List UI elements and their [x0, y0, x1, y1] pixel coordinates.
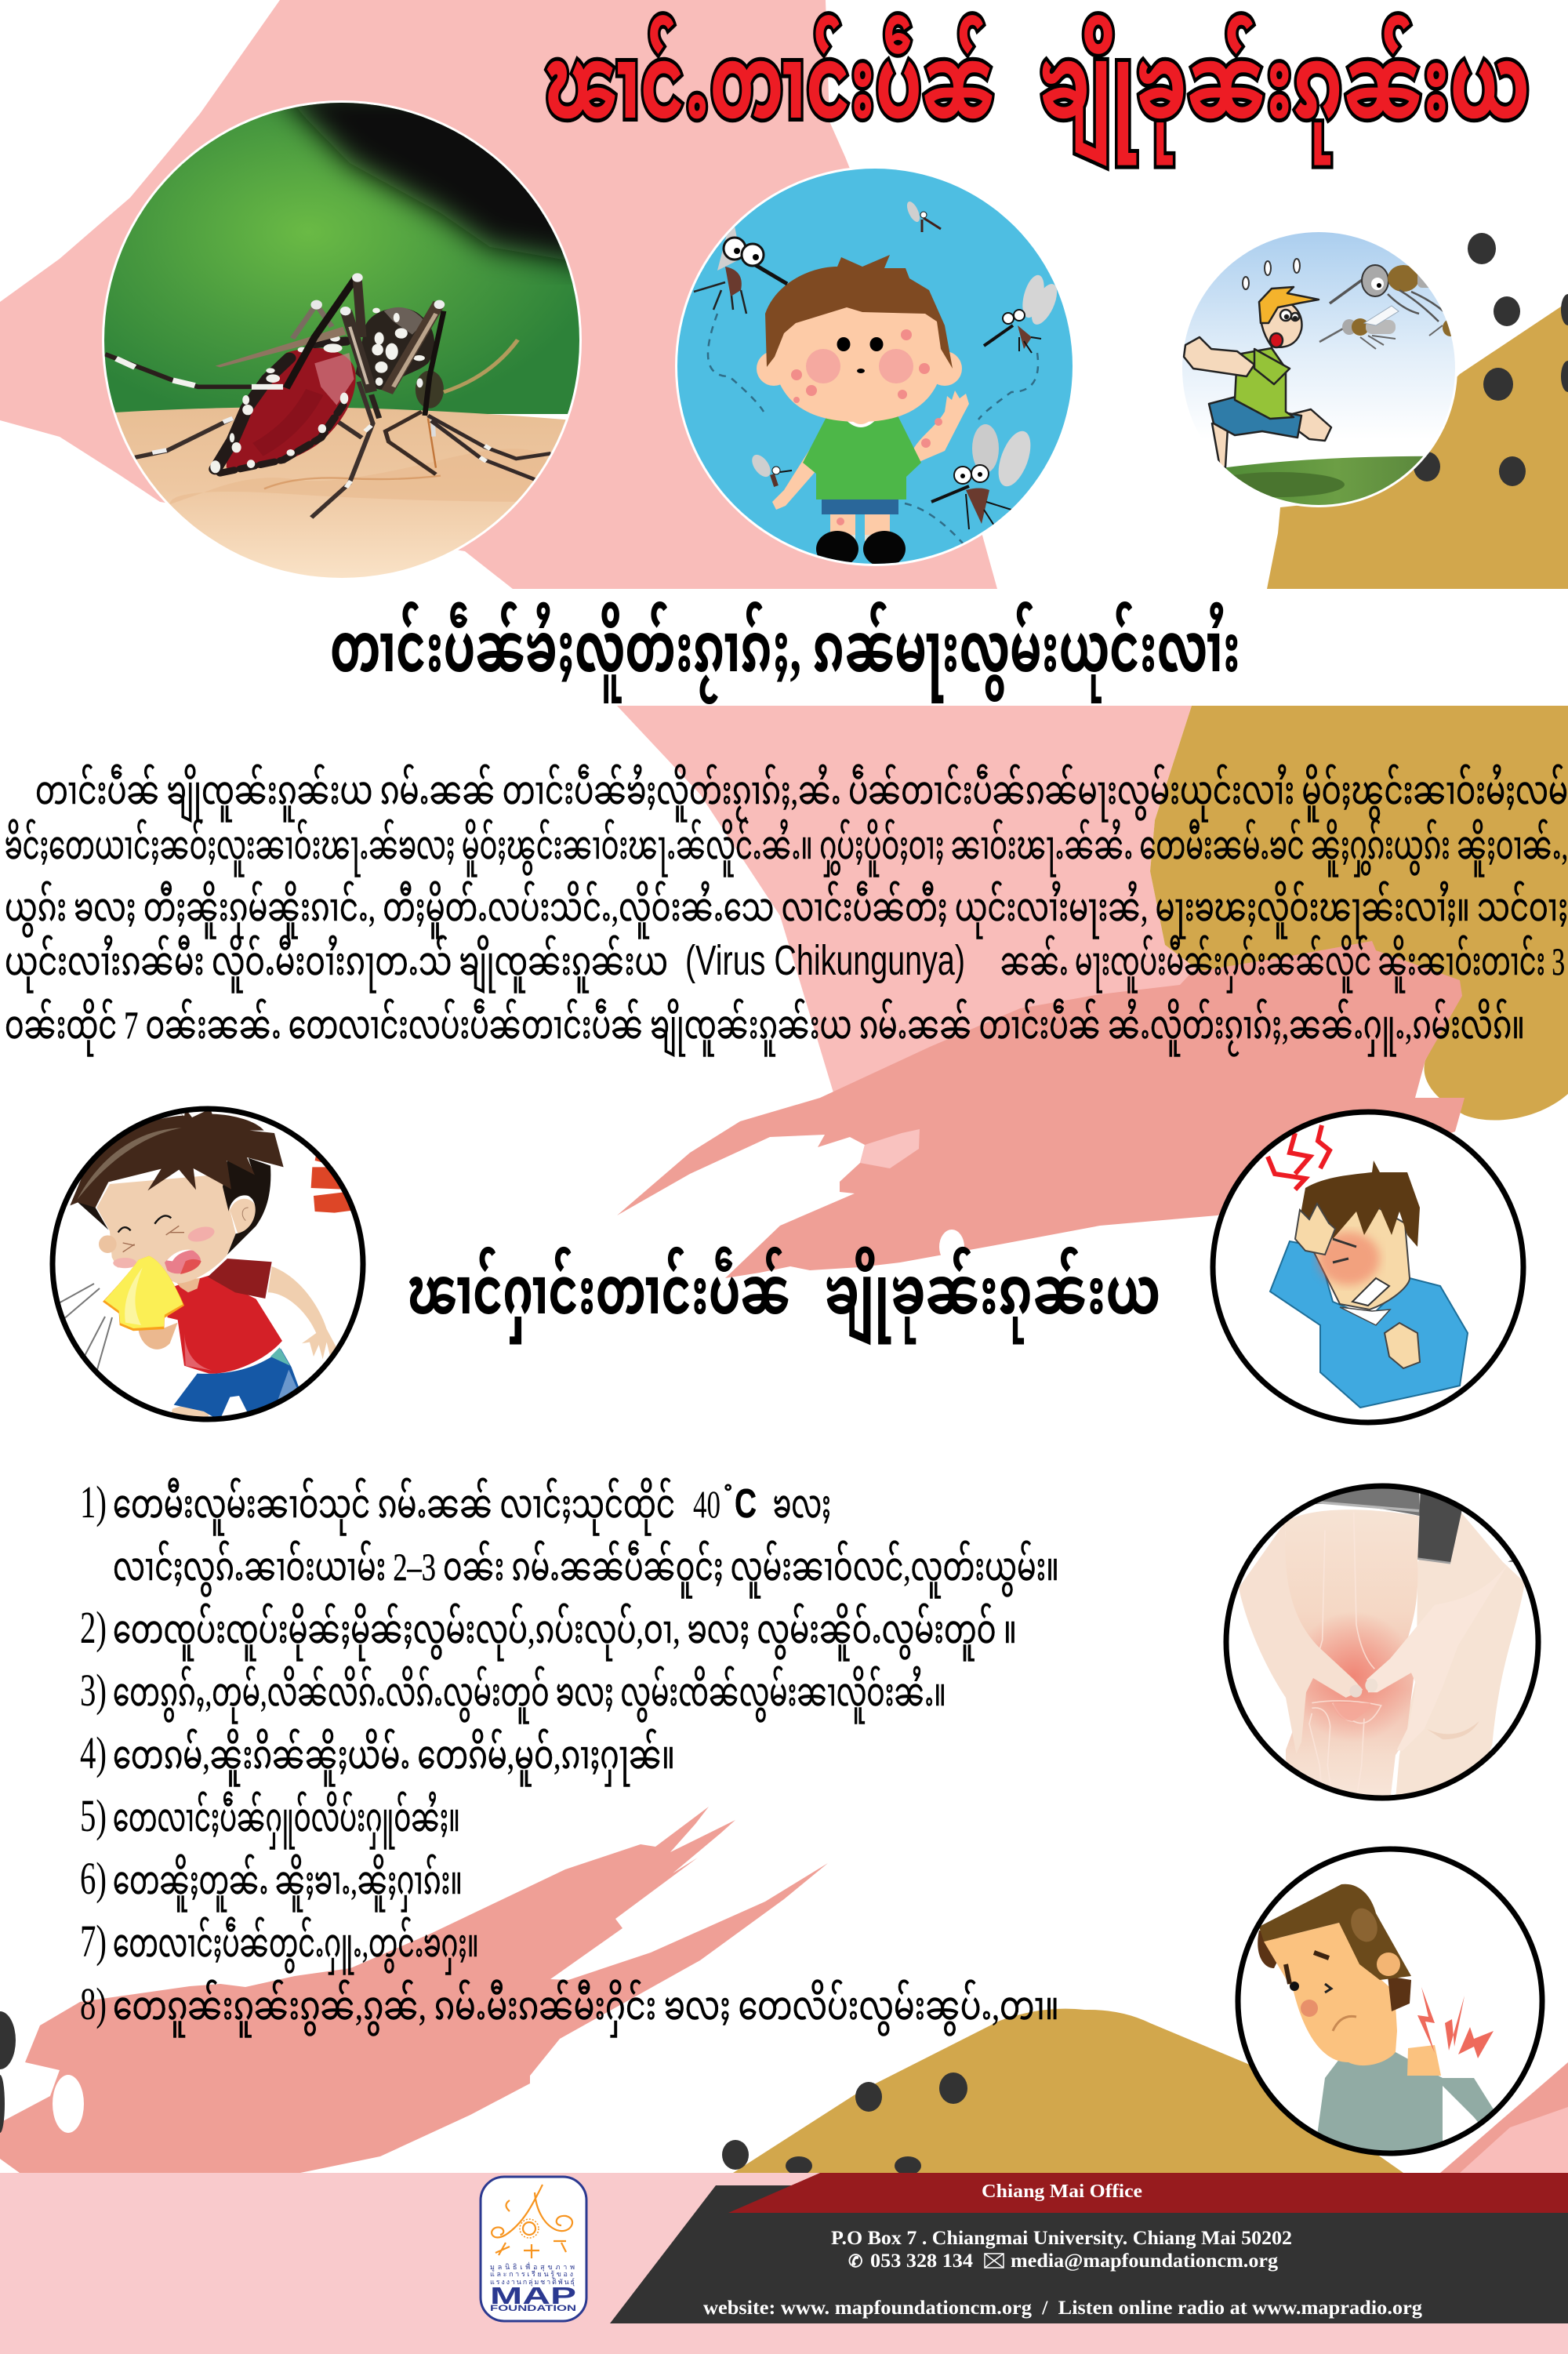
logo: MAP Foundation	[481, 2177, 586, 2321]
symptom 6	[80, 1853, 463, 1912]
section heading: symptoms: ၽၢင်ႁၢင်းတၢင်းပဵၼ်	[408, 1246, 790, 1344]
background: lower left salmon brush stroke	[0, 1807, 828, 2173]
abdomen banding	[216, 341, 346, 473]
red shape behind	[311, 1154, 354, 1213]
sweat drops	[1243, 259, 1300, 289]
footer: phone and email: media@mapfoundationcm.org	[1011, 2250, 1279, 2272]
decorative dots: top right	[1414, 233, 1568, 486]
logo: MAP Foundation: FOUNDATION	[490, 2304, 576, 2313]
arm	[268, 1266, 337, 1359]
background: top pink brush shape	[0, 0, 997, 589]
mouth	[165, 1250, 201, 1273]
man	[1184, 287, 1331, 467]
symptom 1	[80, 1477, 831, 1535]
bones	[1309, 1512, 1381, 1800]
background: middle gold blob	[1150, 706, 1568, 1121]
back leg	[1396, 1512, 1525, 1800]
symptom 5	[80, 1790, 460, 1849]
section heading: symptoms	[408, 1246, 1160, 1345]
symptom 1: ˚	[723, 1479, 733, 1514]
far mosquito	[1429, 319, 1458, 336]
boy head	[757, 255, 962, 525]
logo: MAP Foundation: แรงงานกลุ่มชาติพันธุ์	[490, 2277, 575, 2287]
symptom 7: တေလၢင်ႈပဵၼ်တွင်ႉႁူႉ,တွင်ႉၶႁႈ။	[113, 1917, 479, 1974]
footer background	[0, 2173, 1568, 2354]
hand under tissue	[139, 1323, 178, 1350]
intro paragraph: ယုင်းလၢႆးၵၼ်မီး လိူဝ်ႉမီးဝၢႆးၵႃတႉသ် ၶျိုၸူၼ်းၵူၼ်းယ	[5, 935, 668, 993]
illustration: man running from mosquitoes	[1176, 227, 1462, 510]
mosquito E	[748, 452, 792, 486]
background: bottom right corner brush	[1440, 2062, 1568, 2173]
symptom 4: 4)	[80, 1727, 107, 1778]
sneeze lines	[57, 1284, 112, 1372]
head	[416, 371, 444, 409]
legs	[105, 354, 283, 387]
icon: phone: ✆	[848, 2251, 862, 2271]
symptom 7: 7)	[80, 1916, 107, 1967]
symptom 8	[80, 1978, 1059, 2037]
section heading: symptoms: ၶျိုၶုၼ်းၵုၼ်းယ	[825, 1246, 1160, 1345]
illustration: man with shoulder pain	[1237, 1848, 1543, 2164]
symptom 3	[80, 1665, 946, 1724]
background: light pink fleck in stroke	[860, 1129, 920, 1168]
shirt	[167, 1276, 282, 1374]
footer: phone and email	[848, 2250, 1279, 2272]
symptom 5: 5)	[80, 1790, 107, 1841]
symptom 3: တေၵွၵ်ႇ,တုမ်,လိၼ်လိၵ်ႉလိၵ်ႉလွမ်းတူဝ် ၶလႈ လွမ်းၸိၼ်လွမ်းၼၢလိူဝ်းၼႆႉ။	[113, 1666, 946, 1724]
symptom 1: 1)	[80, 1477, 107, 1528]
thorax	[355, 308, 434, 390]
far legs	[135, 418, 362, 457]
symptom 6: 6)	[80, 1853, 107, 1904]
background: middle salmon brush stroke	[617, 941, 1465, 1278]
footer: red office banner	[728, 2173, 1568, 2213]
decorative dots: on gold hill	[722, 2072, 967, 2175]
photo: painful knee	[1225, 1485, 1539, 1800]
symptom 3: 3)	[80, 1665, 107, 1716]
logo: MAP Foundation: และการเรียนรู้ของ	[490, 2270, 573, 2279]
footer: address: P.O Box 7 . Chiangmai University. Chiang Mai 50202	[831, 2228, 1292, 2249]
mosquito C	[984, 273, 1062, 353]
symptom 1: 40	[693, 1482, 720, 1526]
symptom 1 continued: လၢင်ႈလွၵ်ႉၼၢဝ်းယၢမ်း 2–3 ဝၼ်း ၵမ်ႉၼၼ်ပဵၼ်ဝူင်ႈ လူမ်းၼၢဝ်လင်,လူတ်းယွမ်း။	[113, 1541, 1059, 1598]
symptom 1: ၶလႈ	[773, 1482, 831, 1526]
left hand and arm	[1239, 1521, 1363, 1754]
illustration: boy with mosquito bites	[674, 165, 1076, 569]
symptom 4	[80, 1727, 675, 1786]
neck	[175, 1278, 200, 1292]
symptom 8: တေၵူၼ်းၵူၼ်းၵွၼ်,ၵွၼ်, ၵမ်ႉမီးၵၼ်မီးႁိင်း ၶလႈ တေလိပ်းလွမ်းၼွပ်ႉ,တၢ။	[113, 1980, 1059, 2037]
ear right	[230, 1199, 257, 1234]
leg and shorts	[170, 1402, 209, 1423]
decorative dots and blob: left edge	[0, 2011, 84, 2133]
illustration: sneezing boy	[53, 1109, 363, 1423]
symptom list	[80, 1477, 1059, 2037]
intro paragraph: (Virus Chikungunya)	[685, 937, 965, 984]
symptom 6: တေၼိူႈတူၼ်ႉ ၼိူႈၶၢႉ,ၼိူႈႁၢၵ်း။	[113, 1855, 463, 1912]
main title	[545, 15, 1530, 166]
footer: website and radio: website: www. mapfoundationcm.org / Listen online radio at www.mapradio.org	[703, 2298, 1423, 2319]
small mosquito	[1319, 306, 1399, 349]
background: lower gold hill	[733, 2009, 1403, 2173]
footer: office name: Chiang Mai Office	[982, 2181, 1142, 2202]
mosquito A	[693, 227, 789, 314]
shorts	[1312, 1488, 1421, 1516]
face	[96, 1174, 236, 1284]
antenna	[444, 340, 517, 392]
symptom 2: တေၸူပ်းၸူပ်းမိုၼ်ႈမိုၼ်ႈလွမ်းလုပ်,ၵပ်းလုပ်,ဝၢ, ၶလႈ လွမ်းၼိူဝ်ႉလွမ်းတူဝ် ။	[113, 1604, 1017, 1661]
illustration: man with headache	[1213, 1112, 1523, 1422]
background: top gold blob	[1267, 302, 1568, 589]
symptom 7	[80, 1916, 479, 1974]
logo: MAP Foundation: มูลนิธิเพื่อสุขภาพ	[490, 2261, 575, 2272]
back hair	[223, 1158, 270, 1255]
eyes and cheeks	[118, 1215, 171, 1233]
symptom 4: တေၵမ်,ၼိူးၵိၼ်ၼိူႈယိမ်ႉ တေၵိမ်,မူဝ်,ၵၢႈႁႃၼ်။	[113, 1729, 675, 1786]
icon: envelope	[985, 2254, 1004, 2268]
symptom 1: တေမီးလူမ်းၼၢဝ်သုင် ၵမ်ႉၼၼ် လၢင်ႈသုင်ထိုင်	[113, 1478, 675, 1535]
rear leg behind wing	[292, 304, 332, 339]
main title: ၽၢင်ႉတၢင်းပဵၼ်	[545, 15, 995, 140]
photo: mosquito biting skin	[102, 86, 604, 590]
abdomen	[227, 348, 356, 469]
big mosquito	[1330, 255, 1450, 321]
mosquito D	[931, 424, 1037, 529]
symptom 5: တေလၢင်ႈပဵၼ်ႁူဝ်လိပ်းႁူဝ်ၼႆႈ။	[113, 1792, 460, 1849]
intro paragraph	[5, 765, 1568, 1056]
thigh and knee	[1283, 1509, 1419, 1800]
symptom 2: 2)	[80, 1602, 107, 1653]
symptom 1: C	[735, 1481, 757, 1527]
mosquito B	[907, 202, 942, 232]
background: white fleck in stroke	[939, 1230, 964, 1264]
logo: MAP Foundation: MAP	[490, 2282, 576, 2309]
symptom 2	[80, 1602, 1017, 1661]
wing	[216, 327, 346, 367]
boy body	[772, 391, 969, 567]
background: middle pink band	[617, 706, 1220, 1098]
right hand and arm	[1367, 1564, 1508, 1751]
dashed flight paths	[708, 314, 1038, 545]
tissue	[103, 1256, 184, 1331]
footer: phone and email: 053 328 134	[870, 2250, 974, 2272]
footer: dark contact panel	[610, 2185, 1568, 2323]
symptom 8: 8)	[80, 1978, 107, 2029]
main hair	[70, 1109, 284, 1208]
